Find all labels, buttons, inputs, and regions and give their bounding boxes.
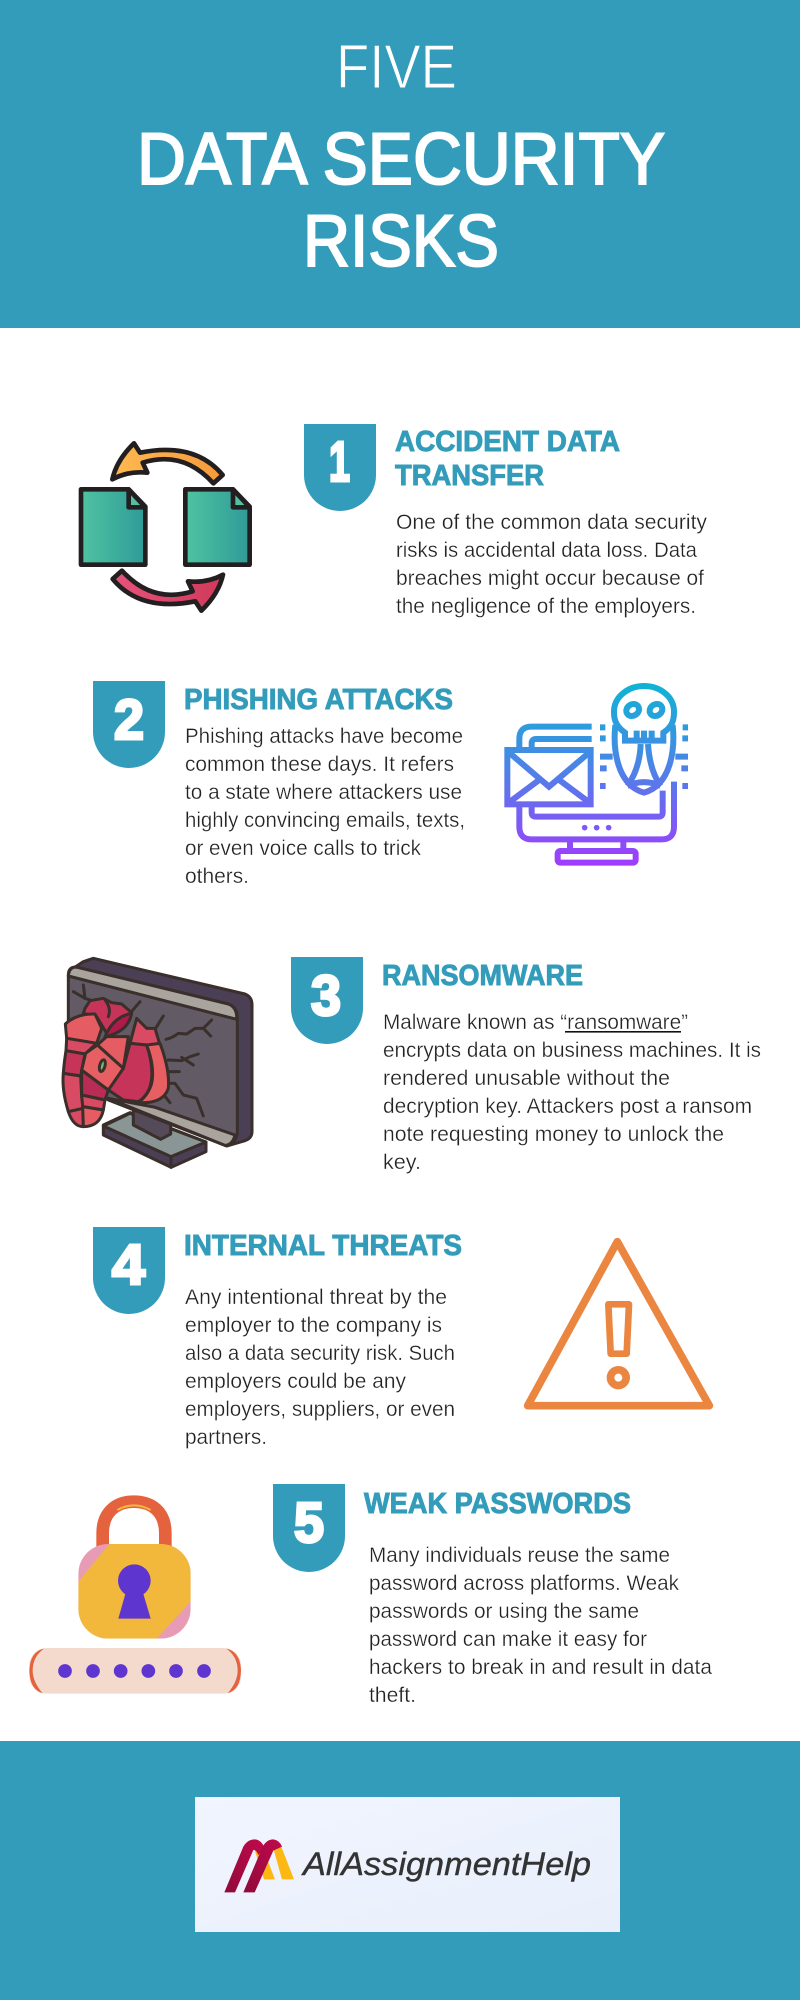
text: ransomware: Malware known as “ransomware” <box>383 1011 688 1034</box>
text: internal threats: employers, suppliers, or even <box>185 1398 455 1421</box>
heading: ransomware: RANSOMWARE <box>382 960 583 992</box>
text: ransomware <box>383 1011 761 1174</box>
footer banner <box>0 1741 800 2000</box>
text: phishing attacks: or even voice calls to trick <box>185 837 421 860</box>
text: phishing attacks: highly convincing emails, texts, <box>185 809 465 832</box>
badge: number 3: 3 <box>311 964 341 1028</box>
heading: phishing attacks: PHISHING ATTACKS <box>184 684 453 716</box>
text: accident data transfer: One of the common data security <box>396 511 707 534</box>
text: accident data transfer <box>396 511 707 618</box>
text: internal threats: employer to the company is <box>185 1314 442 1337</box>
title: FIVE <box>336 33 457 102</box>
text: internal threats: also a data security risk. Such <box>185 1342 455 1365</box>
heading: accident data transfer: TRANSFER <box>395 460 544 492</box>
text: ransomware: decryption key. Attackers post a ransom <box>383 1095 752 1118</box>
text: accident data transfer: the negligence of the employers. <box>396 595 696 618</box>
text: phishing attacks: Phishing attacks have become <box>185 725 463 748</box>
title: RISKS <box>303 201 499 282</box>
text: weak passwords: passwords or using the same <box>369 1600 639 1623</box>
logo panel <box>195 1797 620 1932</box>
title <box>137 33 665 282</box>
text: ransomware: note requesting money to unlock the <box>383 1123 724 1146</box>
text: weak passwords: password can make it easy for <box>369 1628 647 1651</box>
badge: number 1 <box>304 424 376 511</box>
text: weak passwords: password across platforms. Weak <box>369 1572 679 1595</box>
text: ransomware: key. <box>383 1151 421 1174</box>
badge: number 5: 5 <box>294 1491 324 1555</box>
text: phishing attacks: others. <box>185 865 249 888</box>
heading: internal threats: INTERNAL THREATS <box>184 1230 462 1262</box>
text: internal threats <box>185 1286 455 1449</box>
icon: warning triangle <box>528 1242 709 1406</box>
badge: number 5 <box>273 1484 345 1572</box>
heading: accident data transfer: ACCIDENT DATA <box>395 426 620 458</box>
text: weak passwords: hackers to break in and result in data <box>369 1656 712 1679</box>
text: weak passwords <box>369 1544 712 1707</box>
header banner <box>0 0 800 328</box>
logo wordmark: AllAssignmentHelp <box>301 1846 591 1882</box>
heading: accident data transfer <box>395 426 620 492</box>
text: ransomware: rendered unusable without the <box>383 1067 670 1090</box>
text: ransomware: encrypts data on business machines. It is <box>383 1039 761 1062</box>
badge: number 3 <box>291 957 363 1044</box>
icon: ransomware snake through monitor <box>63 958 252 1167</box>
text: phishing attacks: to a state where attackers use <box>185 781 462 804</box>
heading: weak passwords: WEAK PASSWORDS <box>364 1488 631 1520</box>
icon: phishing skull and email on monitor <box>507 686 688 863</box>
badge: number 4: 4 <box>112 1233 145 1297</box>
text: internal threats: employers could be any <box>185 1370 406 1393</box>
text: phishing attacks: common these days. It refers <box>185 753 454 776</box>
icon: logo mark <box>224 1839 294 1892</box>
icon: file transfer <box>81 443 250 611</box>
text: internal threats: Any intentional threat by the <box>185 1286 447 1309</box>
text: accident data transfer: risks is accidental data loss. Data <box>396 539 697 562</box>
text: internal threats: partners. <box>185 1426 267 1449</box>
icon: padlock and password field <box>29 1502 241 1694</box>
text: phishing attacks <box>185 725 465 888</box>
text: accident data transfer: breaches might occur because of <box>396 567 704 590</box>
badge: number 2 <box>93 681 165 768</box>
badge: number 1: 1 <box>329 430 350 494</box>
text: weak passwords: theft. <box>369 1684 416 1707</box>
badge: number 2: 2 <box>114 688 144 752</box>
title: DATA SECURITY <box>137 119 665 200</box>
text: weak passwords: Many individuals reuse the same <box>369 1544 670 1567</box>
badge: number 4 <box>93 1227 165 1314</box>
